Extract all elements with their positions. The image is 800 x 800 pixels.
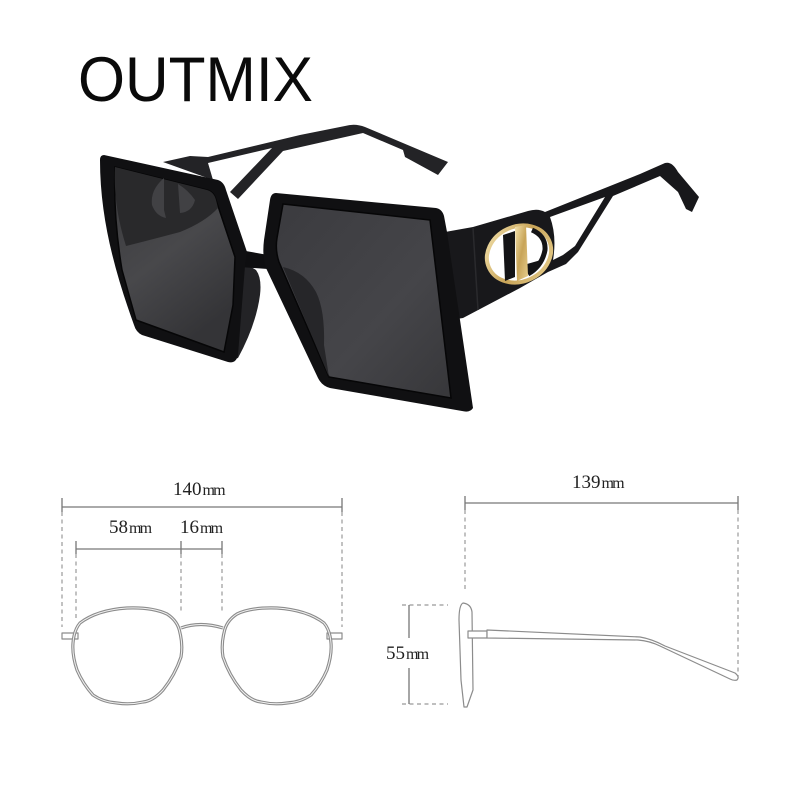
bridge (181, 624, 223, 628)
temple length dimension lines (465, 496, 738, 677)
label: 58mm: 58mm (109, 517, 153, 538)
product photo: sunglasses (100, 125, 699, 412)
label: 55mm: 55mm (386, 643, 430, 664)
left temple stub (62, 633, 78, 639)
right temple arm and logo block (445, 163, 699, 320)
gold D logo (477, 215, 561, 293)
left lens outline (73, 608, 182, 704)
label: 139mm: 139mm (572, 472, 625, 493)
label: 140mm: 140mm (173, 479, 226, 500)
right temple stub (327, 633, 342, 639)
side view diagram (386, 472, 738, 707)
left lens frame (100, 155, 247, 362)
right lens (276, 204, 451, 398)
nose bridge (240, 250, 268, 269)
left lens reflection (115, 167, 218, 246)
temple arm profile (487, 630, 738, 680)
right lens outline (222, 608, 331, 704)
title: OUTMIX (78, 45, 313, 115)
far lens side (232, 262, 260, 360)
hinge (468, 631, 487, 638)
overall width dimension lines (62, 498, 342, 627)
left lens (115, 167, 235, 352)
label: 16mm: 16mm (180, 517, 224, 538)
lens and bridge dimension lines (76, 541, 222, 618)
right lens shadow (283, 267, 329, 377)
right lens frame (263, 193, 473, 412)
lens side profile (459, 603, 473, 707)
reflected logo on lens (152, 178, 195, 218)
lens height dimension lines (402, 605, 448, 704)
front view diagram (62, 479, 342, 704)
far temple arm (163, 125, 448, 199)
